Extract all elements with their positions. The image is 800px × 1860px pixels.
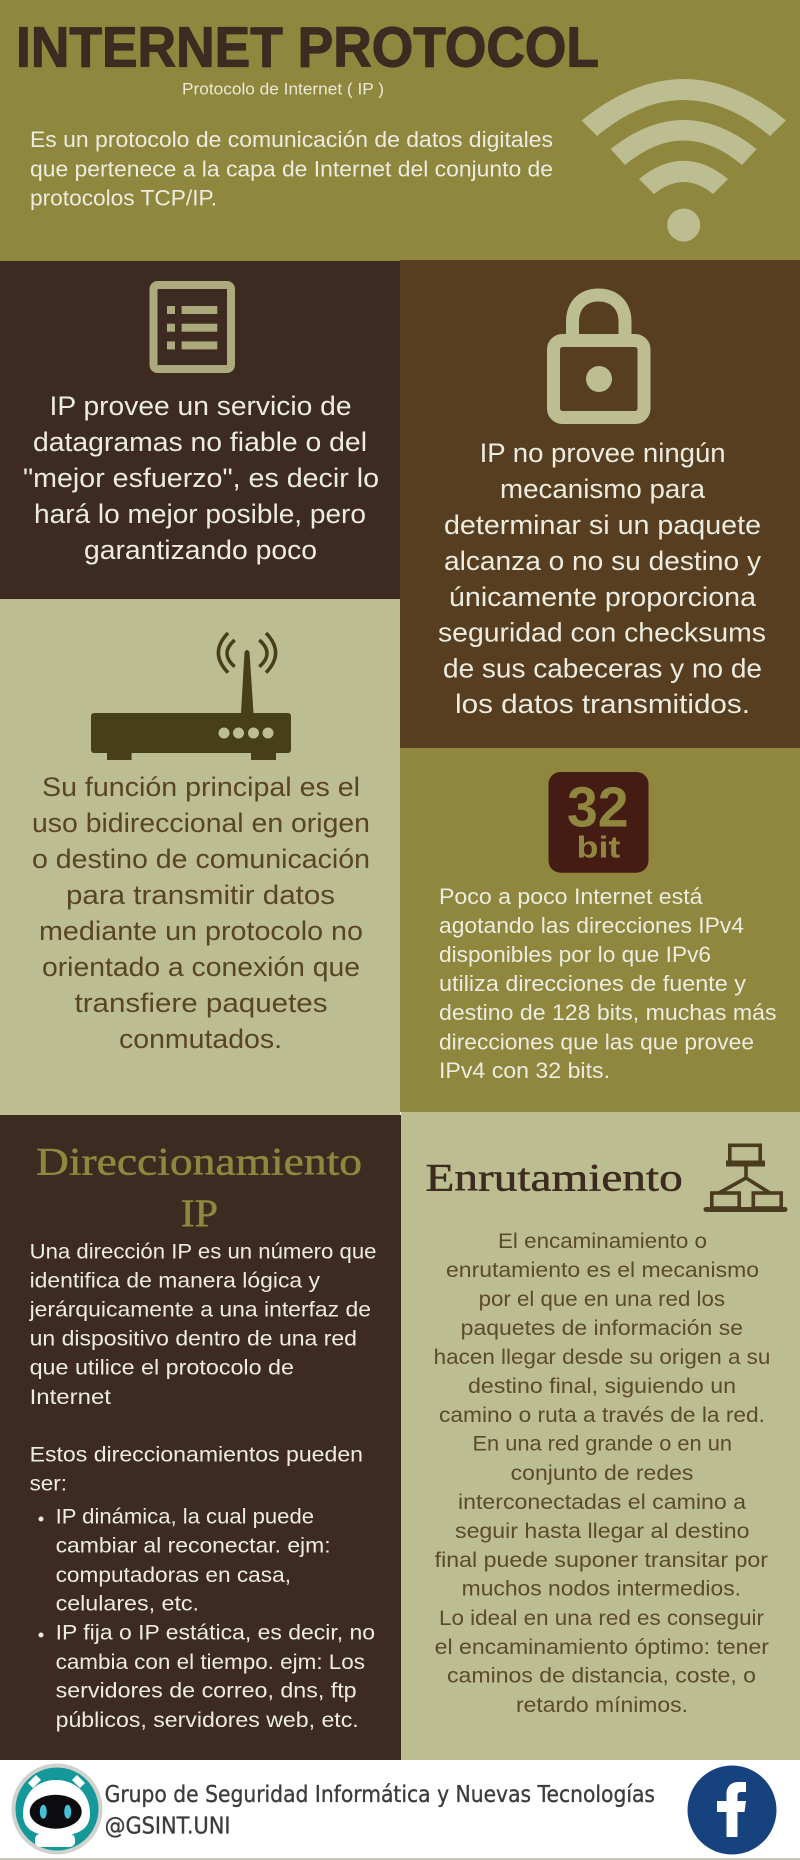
list: address types: IP dinámica, la cual puede: [56, 1504, 314, 1528]
list: address types: [38, 1504, 375, 1732]
text: routing description: Lo ideal en una red es conseguir: [439, 1606, 764, 1630]
heading: Direccionamiento IP: [36, 1141, 362, 1235]
text: security: seguridad con checksums: [438, 618, 766, 648]
text: security: mecanismo para: [500, 474, 706, 504]
panel: 32 bit addressing: [400, 748, 800, 1112]
text: routing description: caminos de distancia, coste, o: [447, 1664, 756, 1688]
text: IP address definition: Internet: [30, 1385, 111, 1409]
text: IP address definition: Una dirección IP es un número que: [30, 1239, 376, 1263]
text: main function: uso bidireccional en origen: [32, 808, 370, 838]
heading: Enrutamiento: Enrutamiento: [426, 1156, 683, 1199]
panel: footer: [0, 1760, 800, 1860]
text: datagram service: datagramas no fiable o del: [33, 427, 367, 457]
text: IPv4 exhaustion: direcciones que las que provee: [439, 1029, 754, 1054]
text: security: de sus cabeceras y no de: [443, 654, 762, 684]
panel: datagram service: [0, 261, 400, 599]
text: IPv4 exhaustion: disponibles por lo que IPv6: [439, 942, 711, 967]
text: datagram service: garantizando poco: [84, 535, 317, 565]
text: routing description: destino final, siguiendo un: [468, 1374, 736, 1398]
intro text: Es un protocolo de comunicación de datos digitales: [30, 127, 553, 152]
text: main function: [32, 772, 370, 1054]
subtitle: Protocolo de Internet ( IP ): [182, 80, 384, 98]
icon: 32 bit badge: bit: [576, 829, 620, 864]
text: main function: orientado a conexión que: [42, 952, 360, 982]
text: routing description: El encaminamiento o: [498, 1229, 707, 1253]
text: IP address definition: un dispositivo dentro de una red: [30, 1326, 357, 1350]
text: IP address definition: identifica de manera lógica y: [30, 1268, 320, 1292]
text: IPv4 exhaustion: utiliza direcciones de fuente y: [439, 971, 746, 996]
intro text: que pertenece a la capa de Internet del conjunto de: [30, 156, 553, 182]
text: security: los datos transmitidos.: [455, 689, 750, 719]
text: datagram service: [23, 391, 379, 565]
text: routing description: [434, 1229, 770, 1717]
text: routing description: final puede suponer transitar por: [435, 1548, 768, 1572]
text: routing description: muchos nodos intermedios.: [462, 1577, 741, 1601]
text: IPv4 exhaustion: [439, 884, 776, 1083]
text: routing description: por el que en una red los: [479, 1287, 725, 1311]
panel: IP addressing: [0, 1115, 401, 1760]
text: security: IP no provee ningún: [480, 438, 726, 468]
list: address types: IP fija o IP estática, es decir, no: [56, 1621, 375, 1645]
text: group name: Grupo de Seguridad Informática y Nuevas Tecnologías: [105, 1782, 655, 1808]
panel: header: [0, 0, 800, 261]
text: security: únicamente proporciona: [449, 582, 757, 612]
text: IP address definition: jerárquicamente a una interfaz de: [29, 1298, 371, 1322]
text: IP address definition: [29, 1239, 376, 1495]
icon: padlock: [554, 295, 644, 418]
text: datagram service: IP provee un servicio de: [50, 391, 352, 421]
text: IPv4 exhaustion: destino de 128 bits, muchas más: [439, 1000, 776, 1025]
text: IPv4 exhaustion: agotando las direcciones IPv4: [439, 913, 744, 938]
text: security: determinar si un paquete: [444, 510, 761, 540]
text: main function: para transmitir datos: [66, 880, 335, 910]
heading: Direccionamiento IP: IP: [181, 1192, 218, 1235]
text: routing description: enrutamiento es el mecanismo: [446, 1258, 759, 1282]
heading: Direccionamiento IP: Direccionamiento: [36, 1141, 362, 1184]
icon: network hierarchy: [706, 1145, 785, 1210]
text: handle: @GSINT.UNI: [105, 1814, 231, 1840]
intro text: protocolos TCP/IP.: [30, 186, 217, 210]
text: IP address definition: ser:: [30, 1471, 67, 1495]
text: routing description: En una red grande o en un: [472, 1432, 732, 1456]
text: main function: mediante un protocolo no: [39, 916, 363, 946]
icon: wifi: [582, 79, 786, 242]
icon: robot logo: [12, 1764, 102, 1854]
text: routing description: camino o ruta a través de la red.: [439, 1403, 765, 1427]
text: security: alcanza o no su destino y: [444, 546, 762, 576]
list: address types: celulares, etc.: [56, 1592, 199, 1616]
panel: main function: [0, 599, 400, 1115]
text: datagram service: hará lo mejor posible, pero: [34, 499, 366, 529]
text: IP address definition: que utilice el protocolo de: [30, 1356, 294, 1380]
text: routing description: paquetes de información se: [461, 1316, 743, 1340]
text: routing description: hacen llegar desde su origen a su: [434, 1345, 770, 1369]
list: address types: públicos, servidores web, etc.: [56, 1708, 359, 1732]
text: routing description: retardo mínimos.: [516, 1693, 688, 1717]
list: address types: computadoras en casa,: [56, 1563, 291, 1587]
icon: document list: [154, 285, 231, 369]
text: routing description: seguir hasta llegar al destino: [455, 1519, 750, 1543]
title: INTERNET PROTOCOL: [16, 16, 599, 80]
text: main function: o destino de comunicación: [32, 844, 370, 874]
intro text: [30, 127, 553, 210]
list: address types: servidores de correo, dns, ftp: [56, 1679, 357, 1703]
icon: router: [91, 633, 291, 760]
icon: 32 bit badge: 32: [567, 776, 629, 840]
panel: security: [400, 260, 800, 748]
text: routing description: conjunto de redes: [511, 1461, 693, 1485]
text: routing description: el encaminamiento óptimo: tener: [435, 1635, 769, 1659]
list: address types: cambiar al reconectar. ejm:: [56, 1534, 331, 1558]
list: address types: cambia con el tiempo. ejm: Los: [56, 1650, 365, 1674]
text: IPv4 exhaustion: Poco a poco Internet está: [439, 884, 703, 909]
text: main function: transfiere paquetes: [74, 988, 328, 1018]
text: IP address definition: Estos direccionamientos pueden: [30, 1443, 363, 1467]
text: IPv4 exhaustion: IPv4 con 32 bits.: [439, 1058, 610, 1083]
text: main function: conmutados.: [119, 1024, 282, 1054]
icon: 32 bit badge: [548, 772, 648, 873]
text: routing description: interconectadas el camino a: [458, 1490, 746, 1514]
text: datagram service: "mejor esfuerzo", es decir lo: [23, 463, 379, 493]
text: security: [438, 438, 766, 719]
text: main function: Su función principal es el: [42, 772, 360, 802]
icon: facebook: [688, 1766, 776, 1854]
panel: routing: [401, 1112, 800, 1760]
